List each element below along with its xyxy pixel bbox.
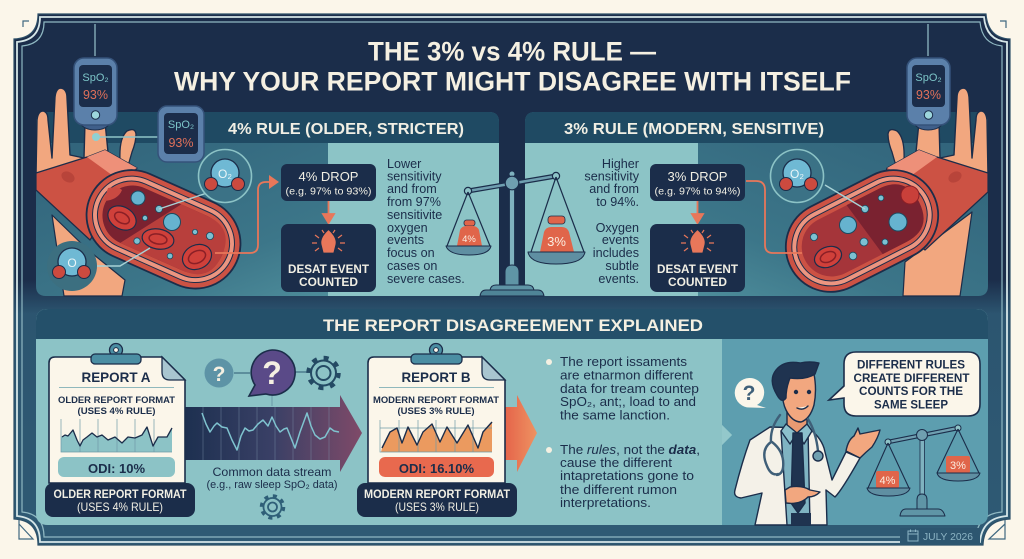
- card: report A: REPORT A: [82, 369, 150, 385]
- chart: report B trace: [380, 420, 492, 452]
- text: 4% rule description: focus on: [387, 246, 435, 260]
- icon: finger pulse oximeter right: [907, 24, 950, 130]
- callout: different rules: CREATE DIFFERENT: [854, 371, 970, 385]
- badge: ODI 16.10%: ODI: 16.10%: [399, 461, 475, 476]
- icon: finger pulse oximeter right: 93%: [916, 88, 941, 102]
- text: 4% rule description: events: [387, 233, 424, 247]
- text: first bullet: are etnarmon different: [560, 368, 693, 382]
- text: second bullet: intapretations gone to: [560, 468, 694, 483]
- callout: different rules: [829, 352, 980, 416]
- text: first bullet: the same lanction.: [560, 408, 670, 422]
- text: second bullet: the different rumon: [560, 482, 677, 497]
- title: WHY YOUR REPORT MIGHT DISAGREE WITH ITSELF: [174, 66, 851, 96]
- icon: gear: [262, 496, 284, 518]
- text: 4% rule description: cases on: [387, 259, 437, 273]
- icon: left O2 molecule callout: [159, 150, 252, 209]
- text: 3% rule description: and from: [589, 182, 639, 196]
- card: report B: REPORT B: [402, 369, 470, 385]
- collar: [781, 424, 812, 444]
- icon: right O2 molecule callout: [770, 150, 865, 209]
- stethoscope: [764, 415, 818, 475]
- heading: 3% rule: 3% RULE (MODERN, SENSITIVE): [564, 121, 824, 138]
- footer date tag: [900, 528, 980, 545]
- card: report B: (USES 3% RULE): [398, 406, 474, 417]
- text: 3% rule description: Oxygen: [596, 221, 639, 235]
- box: desat event counted 3%: COUNTED: [668, 277, 727, 289]
- heading: 4% rule: 4% RULE (OLDER, STRICTER): [228, 121, 464, 138]
- neck: [787, 412, 807, 434]
- box: 4% drop: (e.g. 97% to 93%): [286, 186, 372, 198]
- box: desat event counted 4%: COUNTED: [299, 277, 358, 289]
- arrow: 3% drop down: [692, 201, 703, 223]
- box: desat event counted 3%: [650, 224, 745, 292]
- icon: alert burst: [312, 230, 345, 252]
- text: 3% rule description: events: [602, 233, 639, 247]
- icons: question marks and gear: [204, 350, 338, 406]
- icons: question marks and gear: ?: [213, 363, 225, 386]
- panel: 4% rule: [36, 112, 499, 296]
- hair: [772, 362, 819, 400]
- icon: 4% weight: 4%: [880, 475, 896, 487]
- heading: report disagreement: THE REPORT DISAGREEMENT EXPLAINED: [323, 316, 703, 335]
- text: 3% rule description: Higher: [602, 157, 639, 171]
- title: [174, 36, 851, 96]
- card: report A: (USES 4% RULE): [78, 406, 156, 417]
- text: 3% rule description: includes: [593, 246, 639, 260]
- box: 3% drop: [650, 164, 745, 201]
- box: desat event counted 4%: [281, 224, 376, 292]
- tie: [791, 433, 805, 513]
- arrow: left vessel to drop: [215, 175, 279, 253]
- box: 4% drop: 4% DROP: [299, 169, 358, 184]
- icon: SpO2 readout monitor: SpO₂: [168, 119, 194, 131]
- icon: left O2 molecule callout: O₂: [218, 167, 232, 181]
- text: common data stream caption: (e.g., raw sleep SpO₂ data): [206, 479, 338, 491]
- label: older report format: [45, 483, 195, 517]
- box: desat event counted 4%: DESAT EVENT: [288, 264, 369, 276]
- icon: SpO2 readout monitor: [92, 106, 204, 162]
- text: first bullet: data for tream countep: [560, 381, 699, 396]
- label: older report format: OLDER REPORT FORMAT: [54, 487, 187, 501]
- box: 4% drop: [281, 164, 376, 201]
- icon: 3% weight: [528, 216, 585, 264]
- text: first bullet: The report issaments: [560, 354, 688, 369]
- shirt: [781, 424, 810, 525]
- label: older report format: (USES 4% RULE): [77, 500, 163, 514]
- box: 3% drop: 3% DROP: [668, 169, 727, 184]
- head: [782, 372, 816, 422]
- card: report B: [368, 344, 505, 483]
- icon: lower O2 molecule callout: [47, 241, 150, 291]
- label: modern report format: MODERN REPORT FORMAT: [364, 487, 511, 501]
- text: common data stream caption: [206, 465, 338, 491]
- icon: finger pulse oximeter right: SpO₂: [915, 72, 942, 84]
- illustration: right hand and blood vessel: [770, 88, 988, 307]
- text: second bullet: [546, 442, 700, 510]
- icon: 4% weight: [446, 220, 491, 255]
- illustration: doctor: [735, 362, 880, 525]
- text: 3% rule description: sensitivity: [584, 170, 640, 184]
- arrow: 4% drop down: [323, 201, 334, 223]
- text: 4% rule description: Lower: [387, 157, 421, 171]
- text: 4% rule description: and from: [387, 182, 437, 196]
- text: 4% rule description: sensitivity: [387, 170, 442, 184]
- arrow: report B to explanation: [505, 395, 537, 472]
- icon: explanation scale: [867, 425, 980, 516]
- text: first bullet: [546, 354, 699, 422]
- icon: lower O2 molecule callout: O: [67, 256, 77, 270]
- text: second bullet: The rules, not the data,: [560, 442, 700, 457]
- coat body: [735, 427, 860, 525]
- icon: 3% weight: 3%: [950, 460, 966, 472]
- icon: question bubble: ?: [743, 382, 755, 405]
- arrow: 3% drop to vessel: [746, 181, 802, 253]
- icon: calendar: [908, 530, 918, 541]
- label: modern report format: [357, 483, 517, 517]
- panel: report disagreement explained: [36, 309, 988, 525]
- label: modern report format: (USES 3% RULE): [395, 500, 479, 514]
- icon: alert burst: [681, 230, 714, 252]
- text: 3% rule description: events.: [598, 272, 639, 286]
- icon: SpO2 readout monitor: 93%: [168, 136, 194, 150]
- text: second bullet: interpretations.: [560, 495, 651, 510]
- title: THE 3% vs 4% RULE —: [368, 36, 656, 66]
- callout: different rules: DIFFERENT RULES: [857, 358, 965, 372]
- illustration: left hand and blood vessel: [36, 88, 255, 303]
- central scale: [446, 143, 585, 296]
- text: 4% rule description: sensitivite: [387, 208, 442, 222]
- icon: finger pulse oximeter left: 93%: [83, 88, 108, 102]
- chart: report A trace: [61, 419, 172, 452]
- text: 4% rule description: from 97%: [387, 195, 441, 209]
- icon: finger pulse oximeter left: [74, 24, 117, 130]
- card: report B: MODERN REPORT FORMAT: [373, 395, 499, 406]
- icon: 4% weight: 4%: [462, 234, 476, 245]
- box: desat event counted 3%: DESAT EVENT: [657, 264, 738, 276]
- text: common data stream caption: Common data stream: [212, 465, 332, 479]
- icon: 3% weight: 3%: [547, 234, 566, 249]
- footer date tag: JULY 2026: [923, 531, 973, 543]
- text: 3% rule description: to 94%.: [596, 195, 639, 209]
- icon: clipboard clip: [91, 344, 141, 364]
- icon: right O2 molecule callout: O₂: [790, 167, 804, 181]
- callout: different rules: SAME SLEEP: [874, 398, 948, 412]
- text: 4% rule description: severe cases.: [387, 272, 465, 286]
- lower hand: [785, 486, 820, 503]
- arrow: common data stream: [185, 395, 362, 472]
- text: 3% rule description: subtle: [605, 259, 639, 273]
- icon: finger pulse oximeter left: SpO₂: [82, 72, 109, 84]
- panel: 3% rule: [525, 112, 988, 296]
- badge: ODI 10%: ODI: 10%: [88, 461, 145, 476]
- text: second bullet: cause the different: [560, 455, 672, 470]
- card: report A: OLDER REPORT FORMAT: [58, 395, 175, 406]
- text: first bullet: SpO₂, ant;, load to and: [560, 394, 696, 409]
- icon: question bubble: [735, 378, 766, 408]
- text: 4% rule description: oxygen: [387, 221, 428, 235]
- icons: question marks and gear: ?: [262, 355, 282, 391]
- box: 3% drop: (e.g. 97% to 94%): [654, 186, 740, 198]
- raised hand: [846, 428, 880, 458]
- callout: different rules: COUNTS FOR THE: [859, 384, 963, 398]
- icon: clipboard clip: [411, 344, 462, 364]
- card: report A: [49, 344, 185, 483]
